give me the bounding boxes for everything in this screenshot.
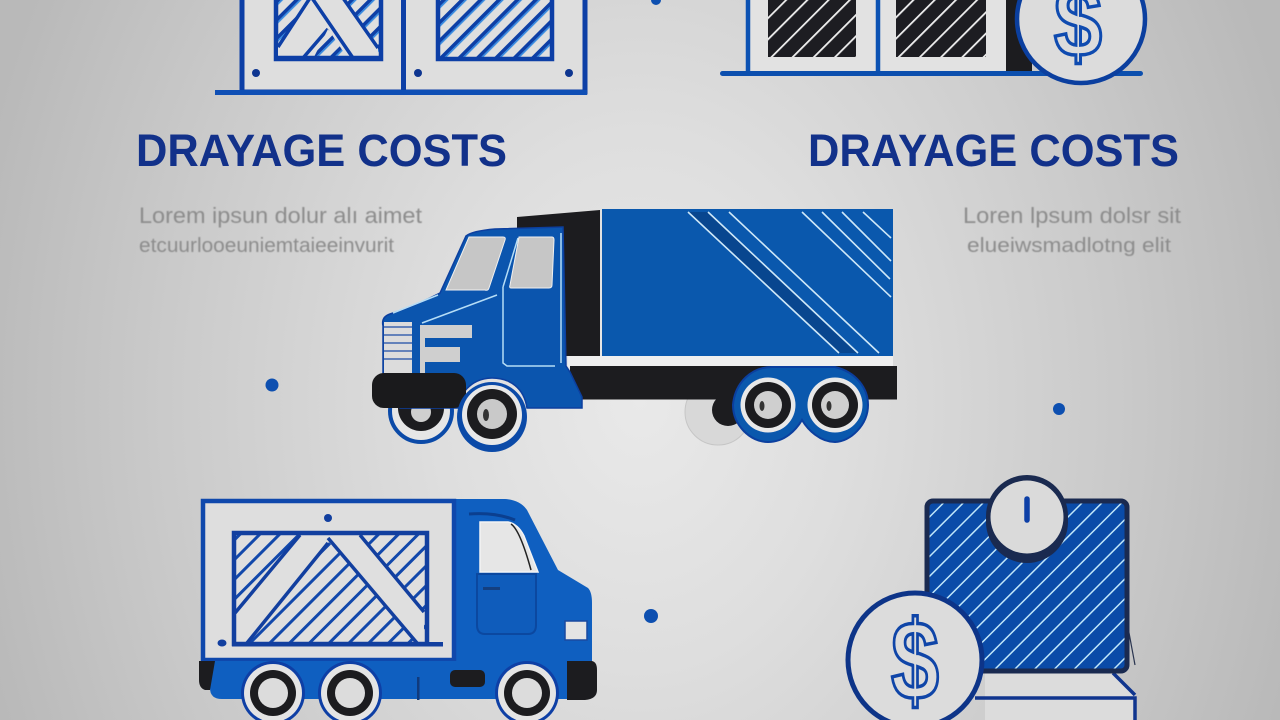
icon: bottom right monitor with coin [848,475,1135,720]
window frame [511,524,531,570]
wheels [241,661,559,720]
seam [417,677,420,700]
rear wheels [740,378,862,432]
coin [848,593,982,720]
cab body [383,227,582,408]
gauge [986,475,1068,563]
bumper [372,373,466,408]
grille [384,322,412,373]
cargo box [203,501,454,660]
windshield [446,237,505,290]
door [477,574,536,634]
base outline [975,673,1135,720]
icon: top left crates [215,0,587,95]
front bumper [567,661,597,700]
thin side line [1127,622,1135,665]
black hatched squares [768,0,986,57]
crate divider [401,0,406,92]
white stripe [568,356,893,367]
front wheel [457,382,527,452]
side step [450,670,485,687]
headlight panel [420,325,472,373]
black post [1006,0,1032,71]
cab [454,499,592,699]
dots [266,378,1065,623]
text block left: etcuurlooeuniemtaieeinvurit [139,235,394,257]
main truck [372,209,897,452]
trailer box [602,209,893,356]
headlight [565,621,587,640]
coin [1017,0,1145,83]
coin: $ [891,598,939,720]
rivets [252,69,573,77]
side window [510,237,554,288]
cab window [480,522,538,572]
heading left: DRAYAGE COSTS [136,125,507,176]
text block right: elueiwsmadlotng elit [967,235,1171,257]
chassis [210,661,567,699]
bottom left truck [199,499,597,720]
icon: top right crates with coin [720,0,1145,83]
window visor [469,514,515,520]
stand [985,673,1135,720]
text block left: Lorem ipsun dolur alı aimet [139,203,422,228]
hidden front wheel [390,380,452,442]
text block left [139,203,422,257]
hatched panel [927,501,1127,671]
crate two hatch [438,0,552,59]
black trailer block [517,210,600,356]
ghost wheel [685,379,751,445]
frame verticals [748,0,878,72]
floor line [215,90,587,95]
floor line [720,71,1143,76]
heading right: DRAYAGE COSTS [808,125,1179,176]
top centre dot [651,0,661,5]
cab highlights [393,233,561,366]
black chassis [570,366,897,400]
text block right [963,203,1181,257]
door handle [483,587,500,590]
box rivets [218,514,332,646]
rear fender [733,367,868,442]
crate with hatch [232,533,443,646]
rear bumper [199,661,215,690]
text block right: Loren lpsum dolsr sit [963,203,1181,228]
crate one hatch [276,0,381,59]
